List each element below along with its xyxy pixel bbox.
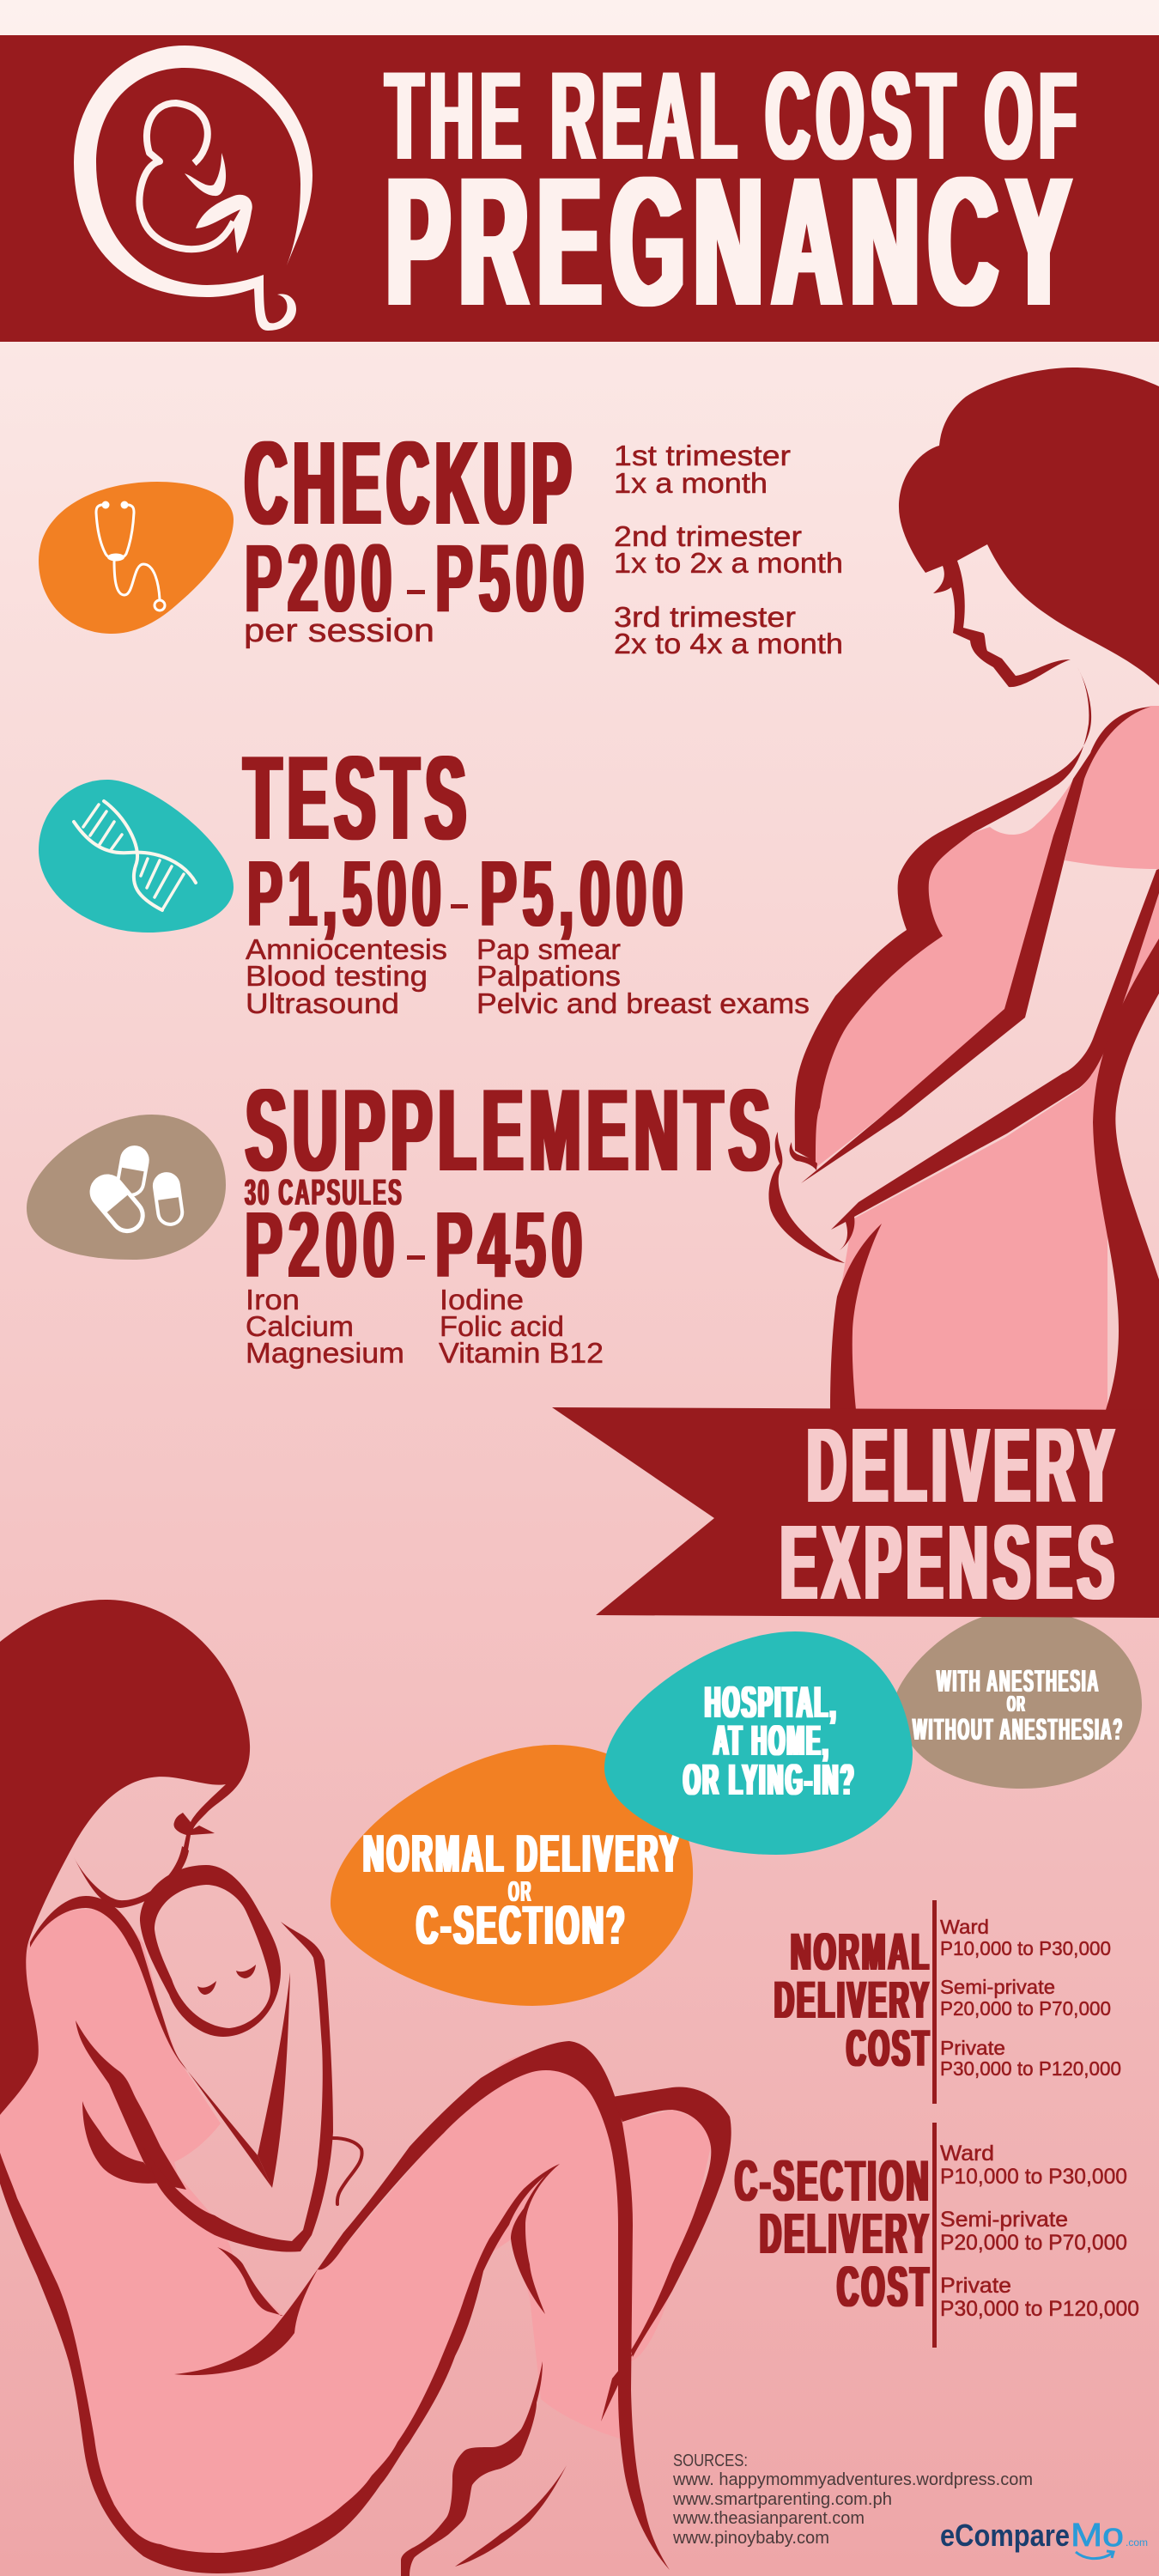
supplements list: Iodine: [440, 1284, 524, 1315]
prices: c-section: P20,000 to P70,000: [940, 2231, 1127, 2255]
heading: c-section delivery cost: C-SECTION: [735, 2148, 931, 2214]
trimester schedule: 1x a month: [614, 467, 768, 499]
bubble: normal delivery or c-section: C-SECTION?: [416, 1894, 628, 1956]
divider: [932, 1900, 937, 2104]
heading: normal delivery cost: DELIVERY: [774, 1971, 931, 2029]
supplements list: Iron: [246, 1284, 300, 1315]
heading: normal delivery cost: COST: [846, 2020, 931, 2077]
dash: [407, 590, 425, 594]
prices: c-section: Semi-private: [940, 2208, 1068, 2232]
trimester schedule: [614, 440, 843, 659]
bubble: hospital, at home or lying-in: AT HOME,: [713, 1716, 830, 1765]
sources: www.pinoybaby.com: [672, 2529, 829, 2548]
supplements list: Vitamin B12: [439, 1337, 604, 1369]
trimester schedule: 3rd trimester: [614, 601, 796, 633]
price: tests high: P5,000: [480, 841, 689, 946]
prices: normal delivery: P20,000 to P70,000: [940, 1997, 1111, 2020]
icon: fetus in womb: [74, 46, 313, 331]
bubble: hospital, at home or lying-in: OR LYING-IN?: [683, 1755, 856, 1804]
price: supplements high: P450: [435, 1193, 588, 1297]
panel: normal delivery cost: [774, 1900, 1121, 2104]
mother and baby illustration: [0, 1600, 731, 2576]
bubble: hospital, at home or lying-in: [604, 1631, 913, 1855]
price: checkup low: P200: [245, 525, 397, 632]
prices: normal delivery: Ward: [940, 1916, 989, 1938]
tests list: Amniocentesis: [246, 933, 447, 965]
icon: dna: [39, 780, 234, 933]
trimester schedule: 2x to 4x a month: [614, 628, 843, 659]
icon: capsules: [27, 1115, 226, 1260]
supplements list: [246, 1284, 604, 1369]
banner: delivery expenses: [552, 1407, 1159, 1622]
icon: stethoscope: [39, 482, 234, 634]
heading: c-section delivery cost: COST: [837, 2255, 931, 2319]
bubble: hospital, at home or lying-in: HOSPITAL,: [705, 1678, 838, 1728]
prices: c-section: P30,000 to P120,000: [940, 2297, 1139, 2321]
heading: c-section delivery cost: [735, 2148, 931, 2319]
dash: [407, 1255, 425, 1260]
per session: per session: [244, 613, 434, 649]
prices: c-section: Private: [940, 2274, 1011, 2298]
bubble: normal delivery or c-section: OR: [508, 1875, 532, 1907]
price: supplements low: P200: [245, 1193, 400, 1297]
logo: eCompareMo: Mo: [1071, 2518, 1124, 2554]
bubble: anesthesia: OR: [1007, 1691, 1026, 1716]
bubble: normal delivery or c-section: NORMAL DELIVERY: [363, 1825, 682, 1884]
sources: SOURCES:: [673, 2451, 748, 2470]
sources: www. happymommyadventures.wordpress.com: [672, 2470, 1033, 2489]
logo: eCompareMo: eCompare: [940, 2518, 1070, 2553]
tests list: [246, 933, 810, 1019]
panel: tests: [39, 732, 810, 1019]
bubble: anesthesia: [893, 1610, 1142, 1789]
trimester schedule: 1x to 2x a month: [614, 547, 843, 579]
sources: www.theasianparent.com: [672, 2509, 865, 2528]
dash: [451, 904, 468, 908]
panel: supplements: [27, 1065, 776, 1369]
header band: [0, 35, 1159, 342]
tests list: Palpations: [476, 960, 621, 992]
panel: checkup: CHECKUP: [245, 417, 577, 550]
prices: normal delivery: Private: [940, 2037, 1005, 2059]
logo: eCompareMo: [940, 2518, 1148, 2559]
prices: normal delivery: [940, 1916, 1121, 2080]
supplements list: Calcium: [246, 1310, 354, 1342]
panel: c-section delivery cost: [735, 2123, 1139, 2348]
logo: eCompareMo: .com: [1126, 2537, 1148, 2549]
tests list: Ultrasound: [246, 987, 399, 1019]
prices: c-section: Ward: [940, 2142, 994, 2166]
heading: c-section delivery cost: DELIVERY: [760, 2202, 931, 2266]
price: tests low: P1,500: [247, 841, 446, 946]
sources: www.smartparenting.com.ph: [672, 2490, 892, 2509]
tests list: Pap smear: [476, 933, 621, 965]
heading: normal delivery cost: [774, 1923, 931, 2077]
30 capsules: 30 CAPSULES: [245, 1172, 404, 1213]
prices: c-section: P10,000 to P30,000: [940, 2165, 1127, 2189]
supplements list: Magnesium: [246, 1337, 404, 1369]
price: checkup high: P500: [435, 525, 590, 632]
prices: normal delivery: Semi-private: [940, 1976, 1055, 1998]
heading: tests: TESTS: [244, 732, 472, 865]
panel: checkup: [39, 417, 843, 659]
tests list: Blood testing: [246, 960, 428, 992]
bubble: normal delivery or c-section: [331, 1745, 693, 2006]
divider: [932, 2123, 937, 2348]
pregnant woman illustration: [768, 368, 1159, 1410]
hair: [0, 1600, 250, 2115]
trimester schedule: 2nd trimester: [614, 520, 802, 552]
prices: normal delivery: P10,000 to P30,000: [940, 1937, 1111, 1959]
heading: normal delivery cost: NORMAL: [791, 1923, 931, 1981]
prices: c-section: [940, 2142, 1139, 2321]
trimester schedule: 1st trimester: [614, 440, 791, 471]
supplements list: Folic acid: [440, 1310, 564, 1342]
prices: normal delivery: P30,000 to P120,000: [940, 2057, 1121, 2080]
tests list: Pelvic and breast exams: [476, 987, 810, 1019]
sources: [672, 2451, 1033, 2548]
